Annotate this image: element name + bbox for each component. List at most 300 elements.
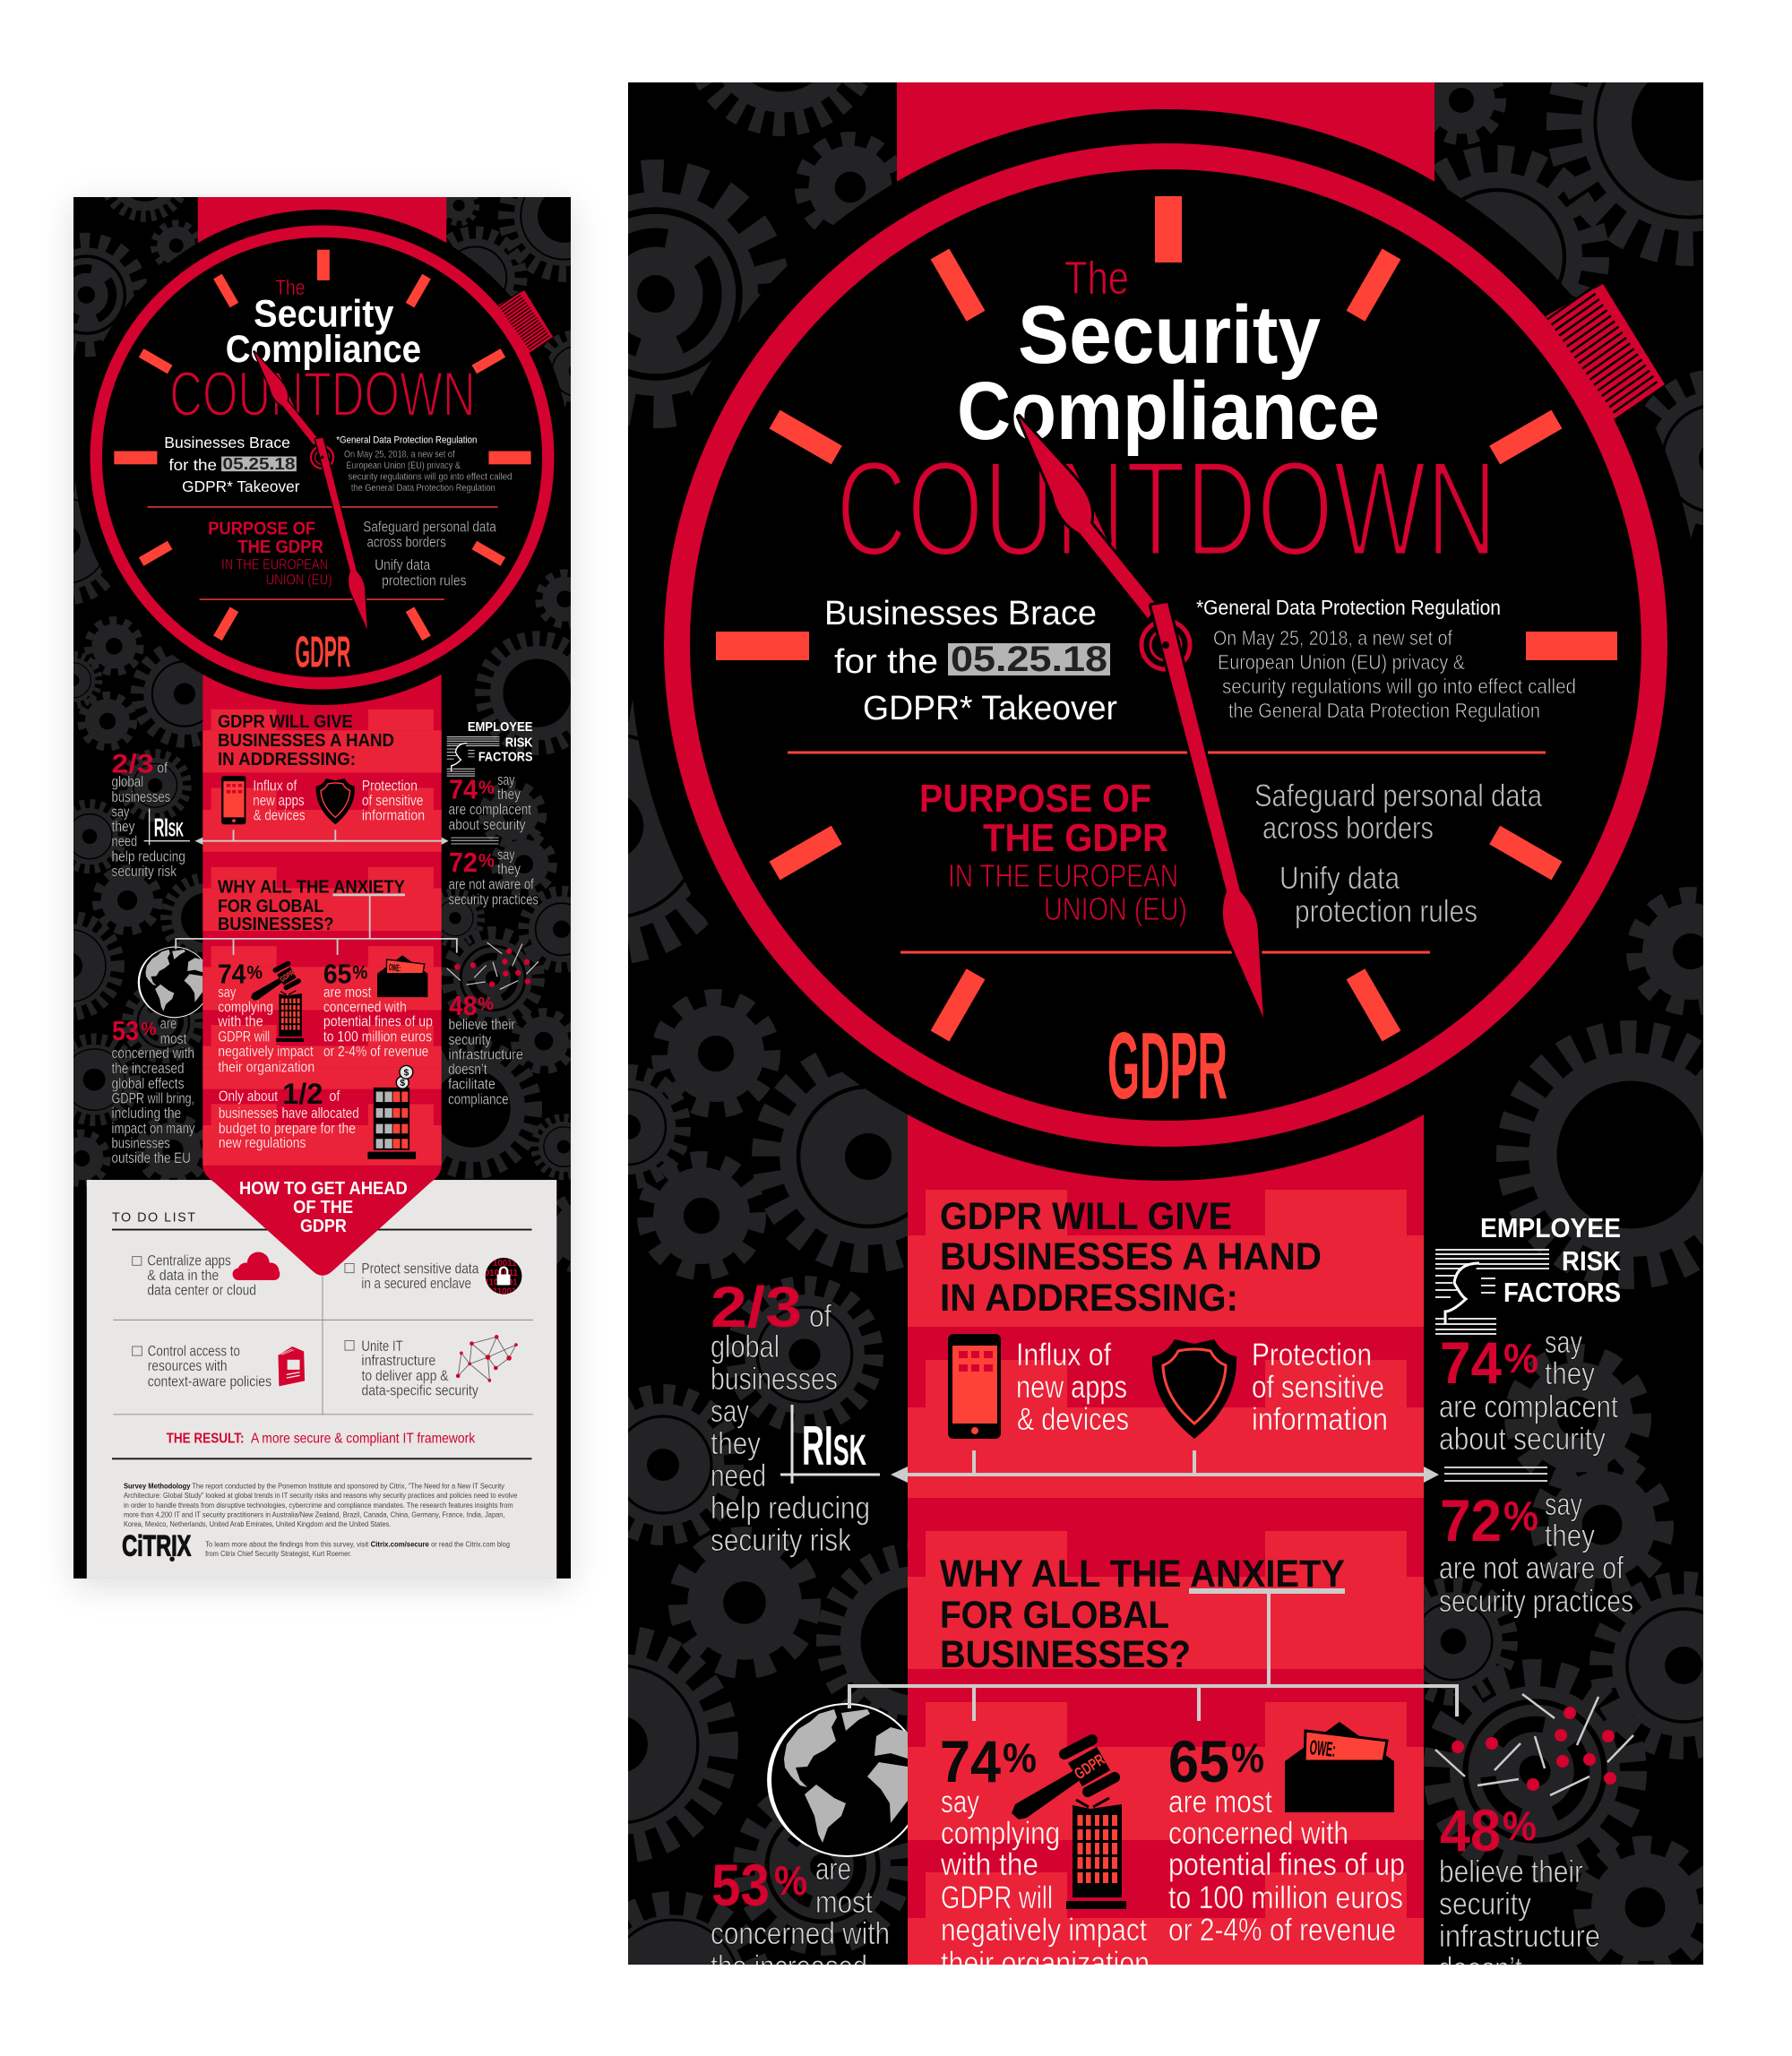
stat: 74% negative impact: their organization: [941, 1946, 1150, 1981]
icon: lock on binary: 10011: [493, 1259, 517, 1269]
text: learn more: [205, 1539, 510, 1558]
icon: burst of dots and lines: [447, 942, 538, 989]
text: influx of new apps: new apps: [1016, 1370, 1127, 1405]
panel: to do list background: [87, 1180, 556, 1579]
stat: 2/3 need help reducing security risk: global: [112, 774, 143, 790]
text: purpose items: across borders: [1262, 811, 1434, 846]
stat: 74% complacent: they: [497, 787, 521, 803]
icon: lock on binary: 0101011: [485, 1269, 519, 1278]
panel: enlarged detail of poster top: [489, 0, 1792, 1986]
survey methodology: Architecture: Global Study” looked at global trends in IT security risks and reasons why security practices and policies need to evolve: [124, 1491, 518, 1500]
text: GDPR definition: [1196, 596, 1576, 722]
result line: [112, 1431, 532, 1459]
stat: 74% negative impact: [218, 959, 314, 1075]
heading: purpose of the GDPR: [919, 777, 1187, 927]
stat: 74% complacent: say: [1545, 1325, 1582, 1360]
stat: 72% not aware: say: [497, 847, 515, 864]
stat: 65% fines: [1168, 1728, 1405, 1948]
background with gears: [73, 197, 571, 1579]
heading: why all the anxiety: [218, 880, 405, 930]
heading: employee risk factors: EMPLOYEE: [468, 720, 532, 735]
subtitle: takeover date: Businesses Brace: [164, 434, 290, 452]
stat: only about 1/2 allocated budget: businesses have allocated: [219, 1105, 359, 1122]
text: purpose items: Unify data: [1279, 861, 1400, 896]
to do: protect sensitive data: in a secured enclave: [361, 1276, 471, 1292]
stat: 48% infrastructure: 48: [449, 991, 477, 1021]
stat: 72% not aware: %: [478, 849, 495, 871]
stat: 65% fines: to 100 million euros: [1168, 1880, 1403, 1915]
stat: 2/3 need help reducing security risk: help reducing: [112, 848, 185, 865]
stat: 2/3 need help reducing security risk: they: [711, 1426, 761, 1461]
survey methodology: [124, 1482, 518, 1528]
stat: 48% infrastructure: facilitate: [448, 1077, 495, 1093]
heading: GDPR will give businesses a hand: [940, 1195, 1322, 1320]
icon: phone: [221, 776, 246, 824]
stat: 2/3 need help reducing security risk: of: [157, 760, 168, 776]
stat: 48% infrastructure: %: [1503, 1802, 1537, 1849]
stat: 2/3 need help reducing security risk: security risk: [711, 1523, 851, 1558]
survey methodology: more than 4,200 IT and IT security practitioners in Australia/New Zealand, Brazil, Canada, China, Germany, France, India, Japan,: [124, 1510, 504, 1519]
survey methodology: in order to handle threats from disruptive technologies, cybercrime and compliance mandates. The research features insights from: [124, 1501, 513, 1510]
title: [172, 280, 471, 416]
heading: employee risk factors: [468, 722, 532, 761]
text: GDPR definition: *General Data Protection Regulation: [1196, 596, 1501, 619]
stat: 65% fines: 65: [1168, 1728, 1229, 1794]
to do: control access: resources with: [148, 1358, 228, 1374]
text: GDPR definition: On May 25, 2018, a new set of: [1213, 626, 1453, 649]
heading: how to get ahead of the GDPR: GDPR: [300, 1217, 347, 1236]
icon: head with lines: [1435, 1250, 1549, 1334]
stat: 48% infrastructure: %: [478, 993, 494, 1014]
stat: 65% fines: or 2-4% of revenue: [323, 1044, 428, 1060]
stat: 74% negative impact: GDPR will: [218, 1029, 270, 1045]
stat: 53% global effects: [112, 1016, 195, 1166]
to do: control access: [133, 1344, 271, 1389]
stat: 65% fines: %: [352, 961, 367, 983]
subtitle: takeover date: [165, 436, 299, 492]
stat: 53% global effects: concerned with: [112, 1045, 194, 1062]
stat: 2/3 need help reducing security risk: security risk: [112, 864, 177, 880]
red strap with chevron: [202, 653, 442, 1276]
heading: why all the anxiety: BUSINESSES?: [218, 915, 333, 934]
heading: why all the anxiety: WHY ALL THE ANXIETY: [940, 1553, 1345, 1596]
text: influx of new apps: Influx of: [1016, 1338, 1111, 1372]
stat: 53% global effects: are: [815, 1852, 851, 1887]
heading: purpose of the GDPR: UNION (EU): [266, 571, 332, 588]
stat: 2/3 need help reducing security risk: they: [112, 819, 135, 835]
text: protection of sensitive information: [1252, 1338, 1388, 1437]
arrow connector: [891, 1450, 1439, 1483]
text: protection of sensitive information: information: [1252, 1402, 1388, 1437]
stat: 74% negative impact: say: [218, 985, 237, 1001]
subtitle: takeover date: 05.25.18: [951, 640, 1107, 679]
stat: 65% fines: concerned with: [1168, 1816, 1348, 1851]
tree connector: [849, 1591, 1457, 1721]
icon: head with lines: [447, 737, 499, 776]
stat: 48% infrastructure: security: [1439, 1887, 1531, 1922]
icon: gavel and building: GDPR: [278, 968, 296, 984]
icon: risk axes: RISK: [802, 1415, 866, 1477]
stat: 65% fines: potential fines of up: [323, 1013, 433, 1029]
heading: employee risk factors: FACTORS: [1503, 1277, 1621, 1308]
stat: 74% negative impact: complying: [218, 999, 273, 1015]
stat: 53% global effects: most: [815, 1885, 873, 1920]
stat: 65% fines: are most: [323, 985, 372, 1001]
text: learn more: Citrix.com/secure: [371, 1539, 429, 1548]
stat: 74% negative impact: 74: [940, 1728, 1001, 1794]
stat: 2/3 need help reducing security risk: of: [809, 1299, 831, 1334]
heading: GDPR will give businesses a hand: [219, 715, 394, 765]
to do: centralize apps: data center or cloud: [147, 1283, 256, 1299]
icon: envelope with OWE letter: OWE:: [388, 962, 401, 974]
stat: 48% infrastructure: infrastructure: [1439, 1919, 1600, 1954]
stat: only about 1/2 allocated budget: budget to prepare for the: [219, 1121, 356, 1137]
stat: 74% negative impact: their organization: [218, 1059, 314, 1075]
stat: 65% fines: to 100 million euros: [323, 1029, 432, 1045]
title: Security: [254, 293, 394, 336]
stat: 2/3 need help reducing security risk: [711, 1275, 870, 1558]
arrow connector: [195, 830, 449, 845]
stat: 2/3 need help reducing security risk: [112, 749, 185, 880]
stat: only about 1/2 allocated budget: Only about: [219, 1088, 278, 1105]
stat: 48% infrastructure: doesn’t: [448, 1062, 487, 1078]
icon: risk axes: [780, 1405, 880, 1484]
text: learn more: or read the Citrix.com blog: [431, 1539, 510, 1548]
stat: 2/3 need help reducing security risk: businesses: [112, 789, 170, 805]
title: Compliance: [957, 366, 1380, 457]
text: purpose items: [363, 520, 496, 589]
heading: purpose of the GDPR: THE GDPR: [237, 538, 323, 557]
divider lines: [451, 838, 499, 844]
stat: 2/3 need help reducing security risk: global: [711, 1329, 780, 1364]
text: learn more: To learn more about the findings from this survey, visit: [205, 1539, 369, 1548]
text: purpose items: protection rules: [1295, 894, 1478, 929]
stat: 53% global effects: %: [774, 1857, 807, 1904]
stat: 74% negative impact: say: [941, 1785, 979, 1819]
to do: centralize apps: Centralize apps: [147, 1252, 231, 1269]
to do: unite IT infrastructure: [345, 1338, 479, 1399]
icon: envelope with OWE letter: [1285, 1722, 1394, 1812]
result line: A more secure & compliant IT framework: [251, 1431, 475, 1446]
heading: how to get ahead of the GDPR: OF THE: [293, 1198, 353, 1217]
heading: employee risk factors: FACTORS: [478, 750, 532, 764]
stat: 48% infrastructure: [448, 991, 523, 1107]
icon: gavel and building: GDPR: [1071, 1751, 1108, 1783]
stat: 53% global effects: including the: [112, 1105, 181, 1122]
stat: 74% complacent: %: [478, 777, 495, 798]
panel shadow: [73, 197, 571, 1579]
text: GDPR definition: On May 25, 2018, a new set of: [344, 449, 455, 460]
title: COUNTDOWN: [836, 433, 1497, 585]
stat: 2/3 need help reducing security risk: need: [711, 1458, 766, 1493]
survey methodology: The report conducted by the Ponemon Institute and sponsored by Citrix, “The Need for a New IT Security: [192, 1482, 505, 1491]
heading: GDPR will give businesses a hand: BUSINESSES A HAND: [218, 731, 394, 751]
to do: centralize apps: [133, 1252, 256, 1299]
clock hands: [254, 352, 367, 630]
stat: 48% infrastructure: believe their: [449, 1017, 516, 1033]
text: protection of sensitive information: [362, 779, 425, 821]
text: purpose items: protection rules: [382, 572, 466, 589]
stat: 53% global effects: %: [141, 1019, 157, 1040]
text: influx of new apps: Influx of: [253, 778, 297, 794]
stat: 74% negative impact: [940, 1728, 1150, 1981]
subtitle: takeover date: for the: [834, 643, 938, 681]
stopwatch face, ring, crown and ticks: [630, 82, 1702, 1181]
panel: full poster overview: [73, 197, 571, 1579]
subtitle: takeover date: GDPR* Takeover: [182, 477, 300, 495]
heading: GDPR will give businesses a hand: IN ADDRESSING:: [218, 750, 356, 770]
to do: control access: context-aware policies: [148, 1373, 271, 1389]
subtitle: takeover date: 05.25.18: [222, 454, 295, 473]
dividers on watch face: [788, 753, 1546, 952]
panel: full poster overview: GDPR: [295, 628, 350, 676]
text: purpose items: Unify data: [375, 557, 430, 573]
to do: unite IT infrastructure: data-specific security: [361, 1383, 479, 1399]
stat: 65% fines: or 2-4% of revenue: [1168, 1913, 1396, 1948]
text: influx of new apps: [254, 779, 305, 821]
stat: 48% infrastructure: compliance: [448, 1091, 509, 1107]
stat: 53% global effects: concerned with: [711, 1916, 890, 1951]
stat: 74% complacent: say: [497, 772, 515, 788]
stat: 72% not aware: are not aware of: [1439, 1551, 1624, 1586]
divider lines: [1444, 1467, 1547, 1481]
heading: GDPR will give businesses a hand: GDPR WILL GIVE: [218, 712, 353, 732]
icon: risk axes: RISK: [154, 814, 184, 843]
heading: employee risk factors: EMPLOYEE: [1480, 1212, 1621, 1243]
text: GDPR definition: the General Data Protection Regulation: [351, 483, 495, 494]
stat: 72% not aware: they: [497, 862, 521, 878]
icon: gavel and building: [251, 964, 304, 1042]
icon: envelope with OWE letter: OWE:: [1308, 1735, 1337, 1761]
icon: network: [456, 1335, 518, 1382]
stat: 53% global effects: most: [160, 1031, 187, 1047]
stat: 65% fines: 65: [323, 959, 351, 989]
stat: 74% complacent: are complacent: [449, 802, 531, 818]
heading: purpose of the GDPR: IN THE EUROPEAN: [221, 555, 328, 572]
heading: employee risk factors: RISK: [1562, 1245, 1622, 1277]
stat: 74% negative impact: %: [1003, 1734, 1037, 1781]
text: GDPR definition: security regulations will go into effect called: [1222, 675, 1576, 698]
to do: unite IT infrastructure: infrastructure: [361, 1353, 435, 1369]
subtitle: takeover date: Businesses Brace: [824, 595, 1097, 632]
icon: globe: [768, 1704, 923, 1856]
stat: 72% not aware: [449, 847, 538, 908]
stat: 48% infrastructure: believe their: [1439, 1854, 1583, 1889]
to do: centralize apps: & data in the: [147, 1268, 219, 1284]
stat: 53% global effects: 53: [112, 1016, 139, 1046]
icon: building with coins: $: [400, 1079, 405, 1088]
stat: 74% negative impact: GDPR will: [941, 1880, 1053, 1915]
icon: lock on binary: [485, 1258, 521, 1297]
stat: 53% global effects: 53: [711, 1852, 770, 1918]
title: COUNTDOWN: [169, 358, 476, 429]
stat: 53% global effects: impact on many: [112, 1121, 195, 1137]
stat: 65% fines: [323, 959, 433, 1060]
stat: 48% infrastructure: security: [449, 1032, 492, 1048]
icon: burst of dots and lines: [1435, 1694, 1633, 1795]
text: GDPR definition: European Union (EU) privacy &: [1218, 650, 1465, 674]
title: Security: [1018, 289, 1321, 381]
stat: 74% complacent: about security: [449, 817, 526, 833]
subtitle: takeover date: [824, 595, 1117, 727]
stat: 74% negative impact: negatively impact: [941, 1913, 1147, 1948]
heading: to do list: TO DO LIST: [112, 1210, 195, 1225]
title: [836, 253, 1497, 585]
text: protection of sensitive information: information: [362, 808, 425, 824]
stat: 53% global effects: the increased: [112, 1061, 184, 1077]
stat: 72% not aware: 72: [1440, 1487, 1502, 1553]
stat: only about 1/2 allocated budget: new regulations: [219, 1135, 306, 1151]
text: protection of sensitive information: of sensitive: [362, 793, 423, 809]
icon: envelope with OWE letter: [377, 955, 427, 997]
stat: 74% complacent: are complacent: [1439, 1389, 1618, 1424]
text: GDPR definition: the General Data Protection Regulation: [1228, 699, 1540, 722]
stat: 74% complacent: they: [1545, 1356, 1595, 1391]
stat: 48% infrastructure: doesn’t: [1438, 1951, 1522, 1986]
heading: employee risk factors: RISK: [505, 736, 533, 750]
heading: why all the anxiety: FOR GLOBAL: [218, 897, 323, 916]
stat: 74% negative impact: with the: [218, 1013, 263, 1029]
heading: how to get ahead of the GDPR: [240, 1182, 407, 1232]
heading: purpose of the GDPR: [208, 519, 332, 588]
stat: 2/3 need help reducing security risk: say: [112, 804, 130, 820]
stat: 74% complacent: %: [1503, 1335, 1538, 1381]
dividers on watch face: [147, 507, 498, 599]
stat: 2/3 need help reducing security risk: 2/3: [112, 749, 154, 779]
text: learn more: from Citrix Chief Security Strategist, Kurt Roemer.: [205, 1549, 351, 1558]
stopwatch face, ring, crown and ticks: [74, 197, 570, 705]
icon: shield: [1152, 1339, 1236, 1439]
stat: 48% infrastructure: infrastructure: [449, 1046, 523, 1062]
title: The: [275, 276, 306, 300]
stat: 53% global effects: outside the EU: [112, 1150, 191, 1166]
to do grid lines: [113, 1276, 533, 1415]
stat: 72% not aware: 72: [449, 847, 478, 878]
stat: only about 1/2 allocated budget: 1/2: [282, 1078, 323, 1110]
to do: unite IT infrastructure: to deliver app &: [361, 1368, 449, 1384]
background with gears: [489, 0, 1792, 1970]
icon: cloud: [233, 1252, 280, 1280]
stat: 53% global effects: businesses: [112, 1135, 170, 1151]
stat: 53% global effects: the increased: [711, 1949, 867, 1984]
stat: 74% complacent: 74: [1440, 1329, 1502, 1396]
icon: building with coins: [367, 1065, 416, 1159]
text: GDPR definition: *General Data Protection Regulation: [336, 435, 478, 446]
survey methodology: Survey Methodology: [124, 1482, 191, 1491]
heading: employee risk factors: [1480, 1212, 1622, 1308]
stat: 2/3 need help reducing security risk: say: [711, 1394, 749, 1429]
to do: protect sensitive data: Protect sensitive data: [361, 1261, 478, 1277]
icon: risk axes: [144, 809, 190, 845]
title: The: [1064, 253, 1129, 305]
stat: 2/3 need help reducing security risk: help reducing: [711, 1491, 870, 1526]
stat: 72% not aware: security practices: [1439, 1584, 1633, 1619]
heading: purpose of the GDPR: IN THE EUROPEAN: [948, 857, 1178, 894]
heading: purpose of the GDPR: PURPOSE OF: [208, 519, 315, 538]
heading: why all the anxiety: FOR GLOBAL: [940, 1594, 1169, 1637]
subtitle: takeover date: GDPR* Takeover: [863, 690, 1117, 727]
to do: control access: Control access to: [148, 1344, 240, 1360]
stat: 2/3 need help reducing security risk: businesses: [711, 1362, 838, 1397]
stat: 2/3 need help reducing security risk: need: [112, 834, 137, 850]
heading: how to get ahead of the GDPR: HOW TO GET AHEAD: [239, 1179, 408, 1199]
text: protection of sensitive information: Protection: [362, 778, 418, 794]
heading: GDPR will give businesses a hand: GDPR WILL GIVE: [940, 1195, 1232, 1238]
text: influx of new apps: & devices: [254, 808, 306, 824]
subtitle: takeover date: for the: [168, 456, 217, 474]
heading: why all the anxiety: WHY ALL THE ANXIETY: [218, 878, 405, 898]
icon: building with coins: $: [404, 1068, 409, 1078]
stat: 72% not aware: [1439, 1487, 1633, 1619]
stat: 53% global effects: [711, 1852, 890, 1984]
text: GDPR definition: European Union (EU) privacy &: [346, 460, 461, 471]
icon: phone: [948, 1334, 1001, 1439]
heading: GDPR will give businesses a hand: BUSINESSES A HAND: [940, 1235, 1322, 1278]
stat: 74% negative impact: negatively impact: [218, 1044, 314, 1060]
stat: 65% fines: potential fines of up: [1168, 1847, 1405, 1882]
stat: 74% negative impact: 74: [218, 959, 246, 989]
stat: 72% not aware: say: [1545, 1487, 1582, 1522]
text: GDPR definition: security regulations will go into effect called: [349, 471, 512, 482]
heading: purpose of the GDPR: UNION (EU): [1044, 890, 1187, 927]
stat: 65% fines: are most: [1168, 1785, 1272, 1819]
title: Compliance: [226, 328, 421, 371]
panel: enlarged detail of poster top: GDPR: [1107, 1013, 1228, 1119]
stat: 72% not aware: are not aware of: [449, 876, 534, 892]
text: influx of new apps: & devices: [1017, 1402, 1129, 1437]
clock hands: [1019, 417, 1263, 1018]
text: GDPR definition: [336, 435, 512, 494]
stat: 72% not aware: they: [1545, 1518, 1595, 1553]
stat: 72% not aware: %: [1503, 1493, 1538, 1539]
stat: 74% complacent: 74: [449, 775, 478, 805]
text: influx of new apps: new apps: [253, 793, 305, 809]
stat: 48% infrastructure: 48: [1440, 1797, 1501, 1863]
icon: globe: [138, 947, 210, 1018]
logo: Citrix: CiTRIX: [122, 1530, 192, 1562]
icon: lock on binary: 1101101: [485, 1278, 518, 1288]
stat: 53% global effects: global effects: [112, 1076, 184, 1092]
survey methodology: Korea, Mexico, Netherlands, United Arab Emirates, United Kingdom and the United States.: [124, 1519, 391, 1528]
stat: 65% fines: %: [1231, 1734, 1264, 1781]
text: purpose items: [1254, 779, 1542, 929]
stat: 65% fines: concerned with: [323, 999, 407, 1015]
stat: 53% global effects: GDPR will bring,: [112, 1090, 194, 1106]
stat: 74% negative impact: %: [246, 961, 263, 983]
stat: 74% complacent: [449, 772, 531, 833]
to do: protect sensitive data: [345, 1261, 478, 1292]
heading: GDPR will give businesses a hand: IN ADDRESSING:: [940, 1277, 1238, 1320]
tree connector: [176, 895, 457, 955]
heading: why all the anxiety: BUSINESSES?: [940, 1633, 1191, 1676]
result line: THE RESULT:: [167, 1431, 245, 1446]
red strap: [908, 1068, 1424, 1965]
stat: 74% complacent: [1439, 1325, 1618, 1457]
icon: shield: [316, 779, 355, 824]
stat: 74% negative impact: complying: [941, 1816, 1060, 1851]
stat: only about 1/2 allocated budget: of: [329, 1088, 340, 1105]
stat: 53% global effects: are: [160, 1016, 177, 1032]
icon: book: [278, 1346, 305, 1386]
stat: 48% infrastructure: [1438, 1797, 1600, 1986]
heading: purpose of the GDPR: THE GDPR: [983, 816, 1168, 860]
heading: purpose of the GDPR: PURPOSE OF: [919, 777, 1151, 821]
icon: gavel and building: [1012, 1740, 1126, 1909]
stat: 74% negative impact: with the: [940, 1847, 1038, 1882]
text: purpose items: Safeguard personal data: [1254, 779, 1542, 813]
text: protection of sensitive information: Protection: [1252, 1338, 1372, 1372]
heading: why all the anxiety: [940, 1553, 1345, 1676]
